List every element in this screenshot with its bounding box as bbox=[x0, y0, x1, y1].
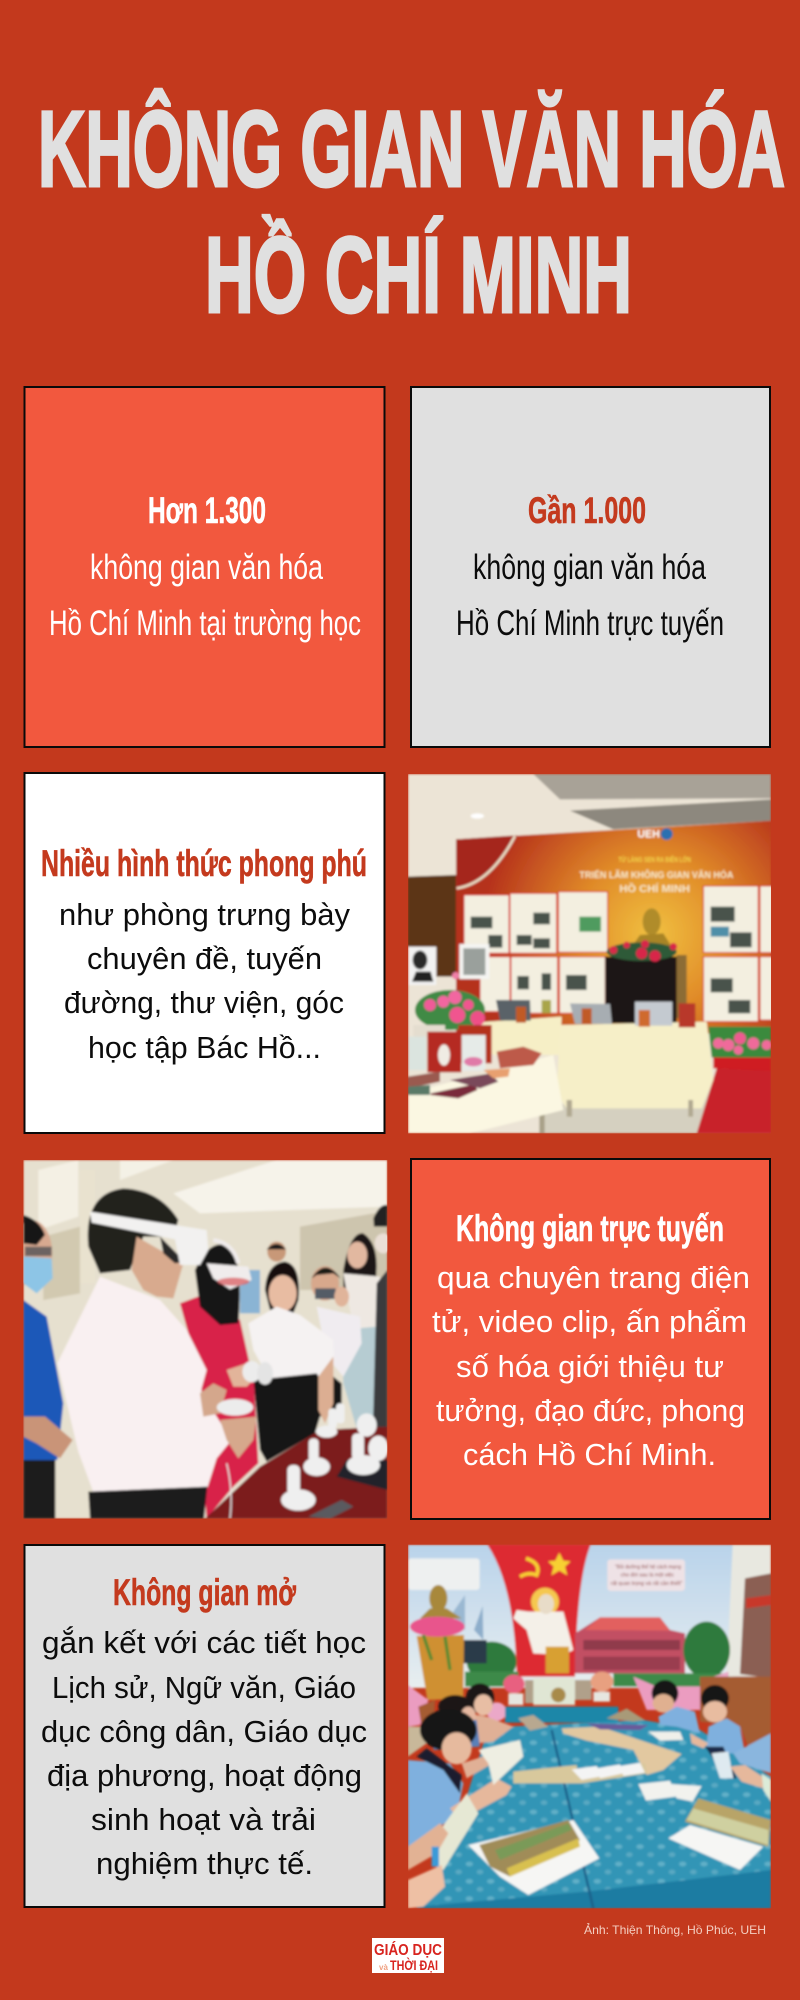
bust bbox=[643, 908, 661, 935]
photo: exhibition: HỒ CHÍ MINH bbox=[619, 882, 690, 895]
panel: nhiều hình thức phong phú: như phòng trưng bày bbox=[59, 897, 350, 932]
panel: hơn 1.300 bbox=[24, 387, 384, 747]
panel: nhiều hình thức phong phú: Nhiều hình thức phong phú bbox=[41, 843, 367, 884]
panel: không gian trực tuyến: cách Hồ Chí Minh. bbox=[463, 1437, 716, 1472]
panel: hơn 1.300: Hồ Chí Minh tại trường học bbox=[49, 604, 361, 643]
books bbox=[427, 1023, 447, 1031]
building bbox=[575, 1617, 685, 1673]
flowers on pedestal bbox=[607, 942, 677, 961]
panel: nhiều hình thức phong phú bbox=[24, 773, 384, 1133]
photo: pupils reading: rất quan trọng và rất cần thiết” bbox=[611, 1581, 682, 1587]
title bbox=[38, 88, 785, 335]
quote boxes bbox=[408, 1558, 480, 1590]
panel: không gian trực tuyến: tưởng, đạo đức, phong bbox=[436, 1393, 745, 1428]
children on the right bbox=[652, 1680, 678, 1707]
backdrop text: UEH bbox=[637, 828, 660, 840]
floor bbox=[544, 1091, 710, 1133]
logo: giáo dục và thời đại: GIÁO DỤC bbox=[374, 1940, 442, 1959]
panel: không gian mở: nghiệm thực tế. bbox=[96, 1846, 313, 1881]
children on the left bbox=[466, 1683, 494, 1713]
monitor bbox=[373, 1270, 387, 1437]
panel: không gian trực tuyến: qua chuyên trang điện bbox=[437, 1260, 750, 1295]
pedestal bbox=[677, 955, 687, 1018]
display stand bbox=[505, 1707, 618, 1723]
background woman bbox=[343, 1233, 377, 1293]
table bbox=[205, 1427, 387, 1519]
controller on cable bbox=[227, 1463, 231, 1519]
table bbox=[420, 1720, 771, 1908]
panel: nhiều hình thức phong phú: chuyên đề, tuyến bbox=[87, 941, 322, 976]
panel: không gian trực tuyến: tử, video clip, ấn phẩm bbox=[432, 1304, 747, 1339]
panel: không gian mở: sinh hoạt và trải bbox=[91, 1802, 316, 1837]
photo: pupils reading bbox=[408, 1545, 771, 1908]
lotus bbox=[408, 1685, 428, 1727]
panel: hơn 1.300: không gian văn hóa bbox=[90, 548, 323, 587]
phone man bbox=[311, 1266, 339, 1301]
laptops bbox=[496, 1000, 531, 1021]
panel: không gian mở: gắn kết với các tiết học bbox=[42, 1625, 366, 1660]
frames bbox=[408, 947, 436, 985]
panel: không gian mở: dục công dân, Giáo dục bbox=[41, 1714, 367, 1749]
panel: gần 1.000 bbox=[411, 387, 770, 747]
woman in red bbox=[180, 1293, 258, 1519]
panel: không gian mở: Không gian mở bbox=[113, 1572, 296, 1613]
fan of books bbox=[562, 1727, 682, 1775]
panel: hơn 1.300: Hơn 1.300 bbox=[148, 490, 266, 531]
student bbox=[265, 1262, 299, 1313]
photo: exhibition bbox=[408, 774, 773, 1133]
panel: không gian mở: Lịch sử, Ngữ văn, Giáo bbox=[52, 1670, 356, 1705]
photo: pupils reading: cho đời sau là một việc bbox=[621, 1573, 674, 1579]
panel: không gian mở bbox=[24, 1545, 384, 1907]
main man bbox=[57, 1277, 232, 1510]
Ho figure bbox=[513, 1610, 573, 1655]
panel: không gian trực tuyến: số hóa giới thiệu tư bbox=[456, 1349, 724, 1384]
logo: giáo dục và thời đại: THỜI ĐẠI bbox=[390, 1956, 438, 1973]
posters bbox=[464, 886, 773, 1022]
photo credit: Ảnh: Thiện Thông, Hồ Phúc, UEH bbox=[584, 1922, 766, 1937]
chairs bbox=[700, 1677, 771, 1752]
photo: exhibition: TỪ LÀNG SEN RA BIỂN LỚN bbox=[618, 855, 691, 864]
bouquet bbox=[415, 990, 485, 1030]
panel: không gian trực tuyến bbox=[411, 1159, 770, 1519]
bust and podium bbox=[417, 1635, 464, 1700]
booklets bbox=[468, 1820, 599, 1895]
panel: gần 1.000: Gần 1.000 bbox=[528, 490, 646, 531]
panel: gần 1.000: không gian văn hóa bbox=[473, 548, 706, 587]
trees bbox=[683, 1622, 730, 1678]
left man in blue bbox=[23, 1300, 63, 1462]
logo: giáo dục và thời đại bbox=[372, 1938, 444, 1973]
panel: nhiều hình thức phong phú: đường, thư viện, góc bbox=[64, 985, 344, 1020]
photo: exhibition: TRIỂN LÃM KHÔNG GIAN VĂN HÓA bbox=[579, 869, 734, 880]
photo: pupils reading: “Bồi dưỡng thế hệ cách mạng bbox=[615, 1564, 681, 1570]
panel: nhiều hình thức phong phú: học tập Bác Hồ... bbox=[88, 1030, 321, 1065]
photo: virtual reality experience bbox=[11, 1160, 392, 1519]
tables bbox=[463, 1017, 562, 1055]
panel: không gian mở: địa phương, hoạt động bbox=[47, 1758, 362, 1793]
logo: giáo dục và thời đại: và bbox=[379, 1963, 388, 1972]
banner bbox=[487, 1545, 591, 1677]
